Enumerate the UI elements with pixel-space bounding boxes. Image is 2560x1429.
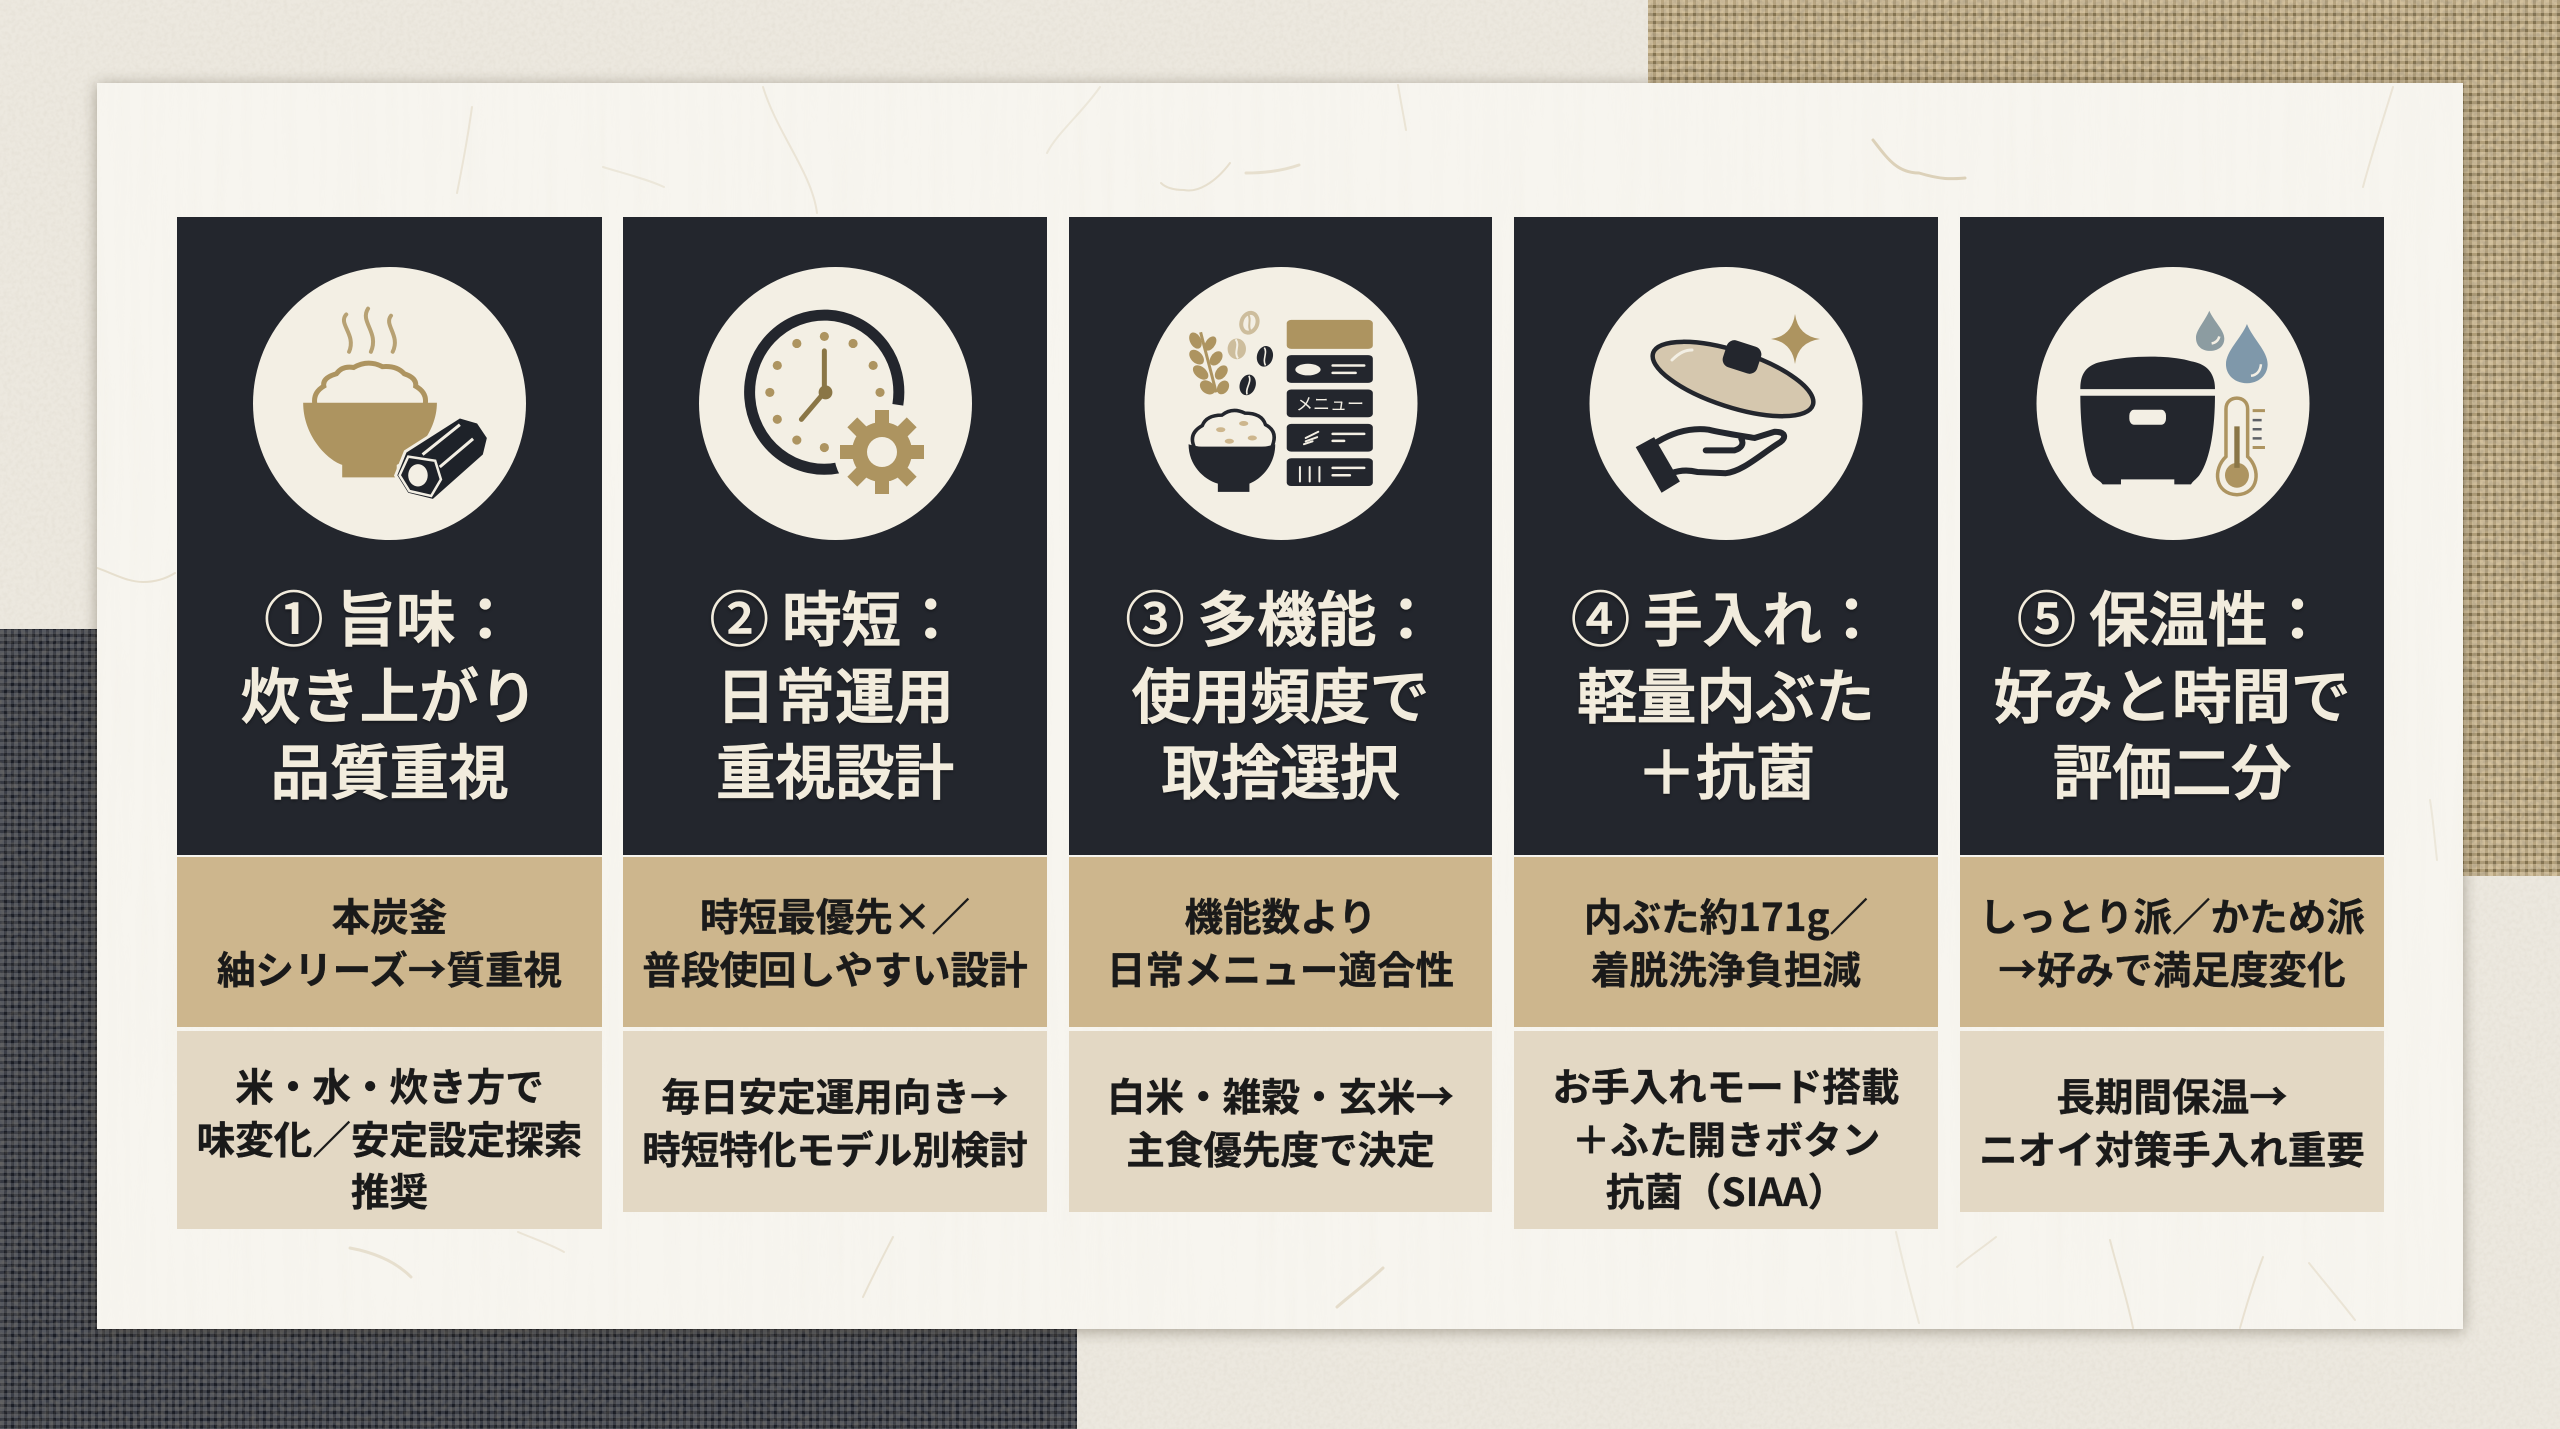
gold row: finding: 普段使回しやすい設計 — [642, 940, 1028, 996]
light row: advice: 毎日安定運用向き→ — [661, 1067, 1009, 1123]
light row: advice: ＋ふた開きボタン — [1572, 1110, 1880, 1166]
title: criterion 3: 取捨選択 — [1162, 726, 1400, 812]
light row: advice: 時短特化モデル別検討 — [642, 1120, 1028, 1176]
gold row: finding: 着脱洗浄負担減 — [1591, 940, 1861, 996]
card 4: 手入れ — [1514, 217, 1938, 1229]
title: criterion 5 — [1994, 573, 2350, 812]
card 1: 旨味 — [177, 217, 602, 1229]
title: criterion 5: 好みと時間で — [1994, 650, 2350, 736]
light row: advice — [177, 1031, 602, 1229]
menu label: メニュー — [1296, 395, 1364, 414]
title: criterion 1: 炊き上がり — [241, 650, 538, 736]
gold row: finding — [1960, 857, 2384, 1027]
gold row: finding: 紬シリーズ→質重視 — [217, 940, 562, 996]
light row: advice: ニオイ対策手入れ重要 — [1979, 1120, 2365, 1176]
light row: advice — [1960, 1031, 2384, 1212]
gold row: finding — [177, 857, 602, 1027]
icon: rice bowl with steam and charcoal — [253, 267, 526, 540]
title: criterion 2 — [710, 573, 960, 812]
title: criterion 4: ＋抗菌 — [1637, 726, 1815, 812]
title: criterion 1 — [241, 573, 538, 812]
icon: clock with gear — [699, 267, 972, 540]
icon: rice cooker, water drops and thermometer — [2036, 267, 2310, 540]
gold row: finding: →好みで満足度変化 — [1998, 940, 2346, 996]
card 2: 時短 — [623, 217, 1047, 1212]
title: criterion 3 — [1125, 573, 1436, 812]
title: criterion 5: 評価二分 — [2053, 726, 2291, 812]
light row: advice: 米・水・炊き方で — [235, 1057, 544, 1113]
icon: lid above open hand — [1590, 267, 1862, 540]
card 3: 多機能 — [1069, 217, 1492, 1212]
gold row: finding: 本炭釜 — [332, 887, 447, 943]
gold row: finding: しっとり派／かため派 — [1979, 887, 2365, 943]
title: criterion 1: 品質重視 — [270, 726, 508, 812]
light row: advice: 長期間保温→ — [2056, 1067, 2288, 1123]
light row: advice: お手入れモード搭載 — [1552, 1057, 1900, 1113]
gold row: finding: 内ぶた約171g／ — [1584, 887, 1868, 943]
title: criterion 2: 重視設計 — [716, 726, 954, 812]
light row: advice — [623, 1031, 1047, 1212]
light row: advice: 白米・雑穀・玄米→ — [1107, 1067, 1454, 1123]
light row: advice: 味変化／安定設定探索 — [197, 1110, 582, 1166]
light row: advice — [1514, 1031, 1938, 1229]
title: criterion 2: ②時短： — [710, 573, 960, 659]
gold row: finding — [623, 857, 1047, 1027]
title: criterion 5: ⑤保温性： — [2017, 573, 2327, 659]
title: criterion 1: ①旨味： — [264, 573, 515, 659]
title: criterion 2: 日常運用 — [716, 650, 954, 736]
light row: advice: 抗菌（SIAA） — [1606, 1162, 1846, 1218]
light row: advice: 推奨 — [351, 1162, 428, 1218]
title: criterion 3: ③多機能： — [1125, 573, 1436, 659]
gold row: finding — [1069, 857, 1492, 1027]
title: criterion 4: ④手入れ： — [1571, 573, 1881, 659]
light row: advice: 主食優先度で決定 — [1126, 1120, 1435, 1176]
title: criterion 3: 使用頻度で — [1132, 650, 1429, 736]
title: criterion 4 — [1571, 573, 1881, 812]
gold row: finding: 時短最優先×／ — [700, 887, 970, 943]
gold row: finding: 日常メニュー適合性 — [1107, 940, 1454, 996]
light row: advice — [1069, 1031, 1492, 1212]
gold row: finding — [1514, 857, 1938, 1027]
gold row: finding: 機能数より — [1184, 887, 1377, 943]
card 5: 保温性 — [1960, 217, 2384, 1212]
title: criterion 4: 軽量内ぶた — [1577, 650, 1875, 736]
icon: grains, rice bowl and menu list — [1144, 267, 1418, 540]
